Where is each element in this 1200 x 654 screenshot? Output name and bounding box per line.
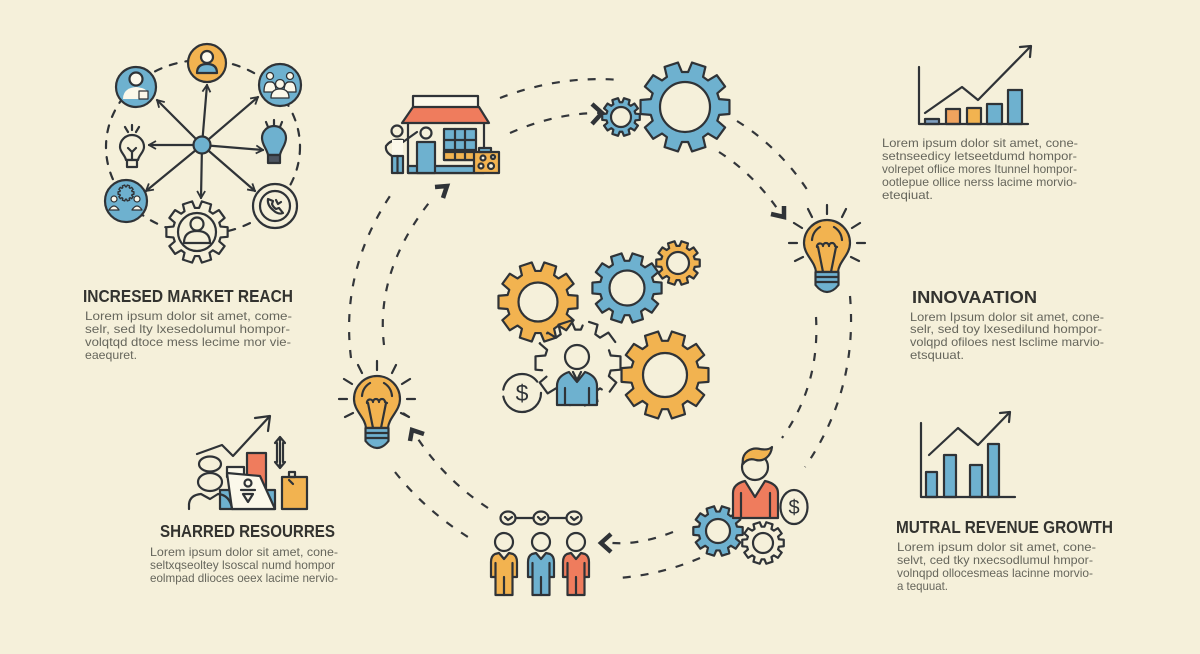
dollar oval: $ <box>788 497 800 519</box>
node: blue person with box <box>116 67 156 107</box>
heading: shared resources: SHARRED RESOURRES <box>160 521 335 541</box>
body text: top right: volrepet oflice mores Itunnel hompor- <box>882 162 1077 176</box>
body text: market reach: eaequret. <box>85 348 137 362</box>
heading: innovation: INNOVAATION <box>912 287 1037 307</box>
body text: revenue: volnqpd ollocesmeas lacinne morvio- <box>897 566 1093 580</box>
icon: top blue gears <box>602 63 729 151</box>
body text: innovation: Lorem Ipsum dolor sit amet, cone- <box>910 310 1104 324</box>
body text: revenue: selvt, ced tky nxecsodlumul hmpor- <box>897 553 1093 567</box>
body text: top right: eteqiuat. <box>882 188 933 202</box>
person in red <box>733 447 778 518</box>
node: outline bulb <box>120 125 144 167</box>
icon: team of three with timeline <box>491 512 589 595</box>
panel: increased market reach <box>83 44 301 362</box>
central small orange gear <box>656 241 700 285</box>
person blue <box>528 533 554 595</box>
central outline gear <box>536 321 620 405</box>
body text: innovation: etsquuat. <box>910 348 964 362</box>
outline gear <box>742 522 784 564</box>
chart: revenue bars and trend arrow <box>921 412 1015 497</box>
icon: store with person and case <box>386 96 499 173</box>
arrow: toward bulb right <box>771 206 784 217</box>
icon: bulb left <box>339 361 415 448</box>
central person <box>557 345 597 405</box>
arrow: toward store <box>435 186 447 198</box>
body text: shared resources <box>150 545 338 585</box>
hub arrows <box>146 85 263 198</box>
body text: innovation <box>910 310 1104 362</box>
blue gear <box>693 506 743 556</box>
body text: market reach: Lorem ipsum dolor sit amet, come- <box>85 309 292 323</box>
icon: bulb right <box>789 205 865 292</box>
node: blue bulb <box>262 120 286 163</box>
body text: market reach: selr, sed lty lxesedolumul hompor- <box>85 322 290 336</box>
person orange <box>491 533 517 595</box>
panel: mutual revenue growth <box>896 412 1113 593</box>
body text: innovation: volqpd ofiloes nest lsclime marvio- <box>910 335 1104 349</box>
body text: shared resources: seltxqseoltey lsoscal numd hompor <box>150 558 335 572</box>
heading: market reach: INCRESED MARKET REACH <box>83 286 293 306</box>
central dollar coin <box>503 374 541 412</box>
central big orange gear <box>622 332 708 418</box>
chart: bars and trend arrow <box>919 46 1031 124</box>
body text: top right: setnseedicy letseetdumd hompor- <box>882 149 1077 163</box>
node: blue gear team <box>105 180 147 222</box>
central blue gear <box>592 253 662 323</box>
body text: top right: ootlepue ollice nerss lacime morvio- <box>882 175 1077 189</box>
arrow: toward team <box>601 534 611 552</box>
node: phone <box>253 184 297 228</box>
hub <box>194 136 210 154</box>
icon: person with gears and dollar <box>693 447 808 564</box>
panel: top right growth chart <box>882 46 1078 202</box>
icon: central gears and person <box>498 241 708 418</box>
node: blue group <box>259 64 301 106</box>
icon: shared resources <box>189 416 307 509</box>
person red <box>563 533 589 595</box>
timeline clocks <box>500 512 582 524</box>
body text: revenue: a tequuat. <box>897 579 948 593</box>
panel: shared resources <box>150 416 338 585</box>
body text: innovation: selr, sed toy lxesedilund hompor- <box>910 322 1102 336</box>
body text: top right: Lorem ipsum dolor sit amet, cone- <box>882 136 1078 150</box>
arrow: toward bulb left <box>410 430 424 441</box>
body text: shared resources: Lorem ipsum dolor sit amet, cone- <box>150 545 338 559</box>
network diagram <box>105 44 301 263</box>
node: orange person <box>188 44 226 82</box>
arrow: into small gear <box>592 104 602 124</box>
central dollar coin: $ <box>516 380 529 406</box>
body text: market reach: volqtqd dtoce mess lecime mor vie- <box>85 335 291 349</box>
body text: revenue <box>897 540 1096 593</box>
body text: shared resources: eolmpad dlioces oeex lacime nervio- <box>150 571 338 585</box>
central orange gear left <box>498 262 578 342</box>
panel: innovation <box>910 287 1104 362</box>
cycle: dashed connector loop <box>349 79 851 578</box>
body text: revenue: Lorem ipsum dolor sit amet, cone- <box>897 540 1096 554</box>
heading: revenue: MUTRAL REVENUE GROWTH <box>896 517 1113 537</box>
body text: top right <box>882 136 1078 202</box>
body text: market reach <box>85 309 292 362</box>
node: gear person <box>166 201 228 263</box>
